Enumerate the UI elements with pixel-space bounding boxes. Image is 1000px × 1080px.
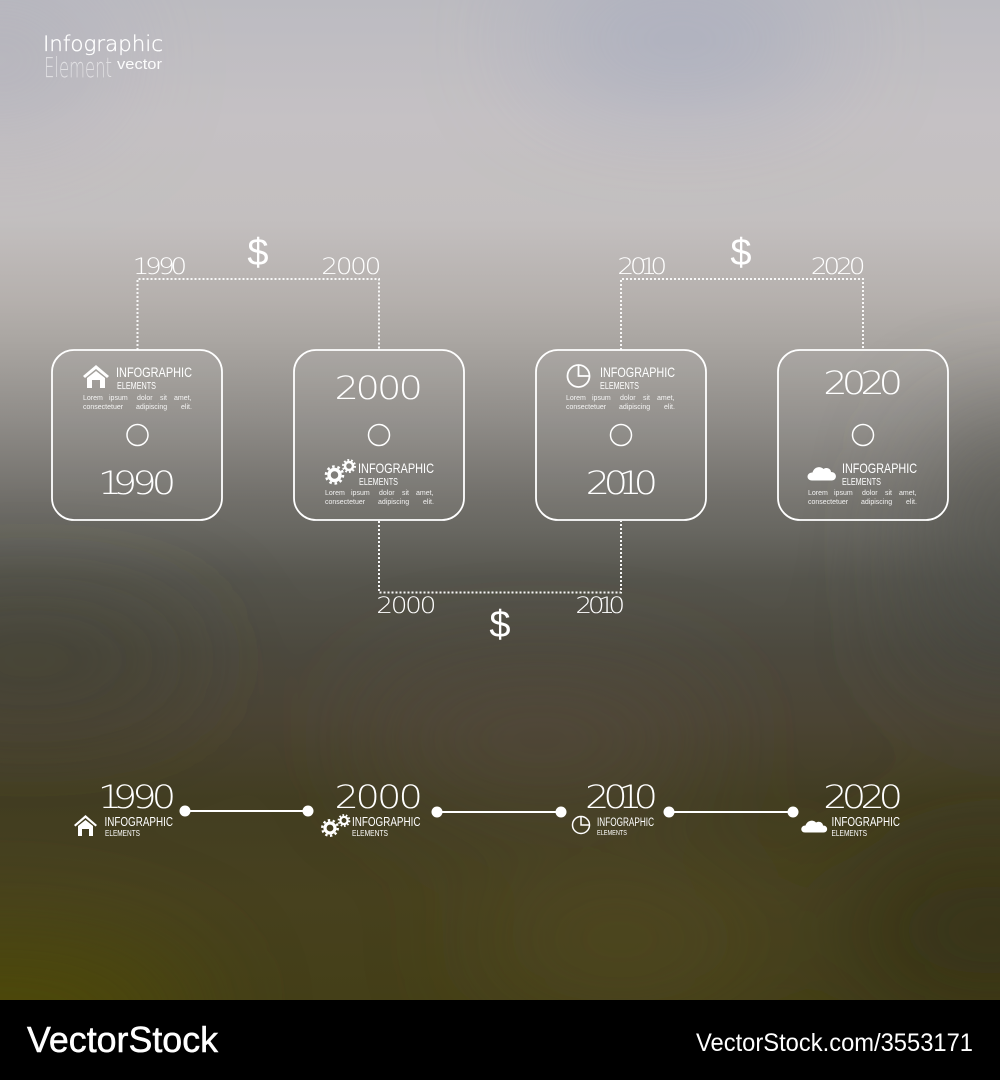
year: 2020 [823,365,903,402]
body text: elit. [664,404,675,411]
heading: ELEMENTS [117,381,156,392]
body text [83,395,192,411]
body text: ipsum [109,395,128,402]
heading: ELEMENTS [600,381,639,392]
label: INFOGRAPHIC [832,814,900,829]
body text: dolor [137,395,153,402]
label: INFOGRAPHIC [597,817,654,829]
connector labels: 2010 to 2020 [617,232,866,279]
icon: house [83,365,109,388]
label [352,814,420,838]
icon: house [74,815,97,836]
connector labels: 2010 to 2020: 2020 [811,253,866,279]
timeline segment: 1990 to 2000 [180,806,314,816]
body text [566,395,675,411]
body text: elit. [423,499,434,506]
watermark bar [0,1000,1000,1080]
watermark url: VectorStock.com/3553171 [696,1029,973,1057]
icon: gears [326,460,355,484]
title: vector [117,56,162,73]
body text [325,490,434,506]
body text: ipsum [351,490,370,497]
label: INFOGRAPHIC [104,814,173,829]
label [597,817,654,837]
body text: dolor [620,395,636,402]
body text: sit [402,490,409,497]
connector labels: 2000 to 2010: $ [489,604,511,646]
timeline item: 1990 [74,779,176,838]
connector: 2000 to 2010 [379,521,621,592]
panel: 2020 [778,350,948,520]
icon: pie chart [568,365,590,387]
body text: consectetuer [325,499,366,506]
node circle [127,424,148,446]
body text: ipsum [834,490,853,497]
body text: Lorem [83,395,103,402]
connector labels: 2000 to 2010: 2010 [575,592,625,618]
timeline segment: 2000 to 2010 [432,806,566,818]
heading [116,364,192,392]
body text: amet, [416,490,434,497]
year: 2000 [335,370,423,407]
label: ELEMENTS [832,828,867,838]
body text: sit [885,490,892,497]
watermark logo text: VectorStock [27,1019,219,1060]
connector: 2010 to 2020 [621,279,863,350]
body text: amet, [899,490,917,497]
body text: elit. [906,499,917,506]
timeline item: 2020 [801,779,903,838]
body text: Lorem [325,490,345,497]
connector labels: 2000 to 2010: 2000 [376,592,436,618]
timeline item: 2000: 2000 [335,779,423,816]
icon: cloud [801,821,827,832]
connector labels: 2010 to 2020: $ [730,232,752,274]
timeline item: 2020: 2020 [823,779,903,816]
heading [358,460,434,488]
timeline item: 2010 [572,779,658,837]
panel: 1990 [52,350,222,520]
timeline item: 1990: 1990 [98,779,176,816]
panel: 2000 [294,350,464,520]
heading: ELEMENTS [842,477,881,488]
heading: INFOGRAPHIC [842,460,917,476]
label: ELEMENTS [352,828,388,838]
node circle [852,424,874,446]
body text [808,490,917,506]
label: ELEMENTS [597,828,627,837]
body text: adipiscing [378,499,409,506]
body text: elit. [181,404,192,411]
title: Element [44,51,112,84]
connector labels: 1990 to 2000: $ [247,232,269,274]
connector labels: 1990 to 2000 [133,232,381,279]
heading: INFOGRAPHIC [116,364,192,380]
body text: Lorem [566,395,586,402]
connector labels: 2000 to 2010 [376,592,625,646]
timeline segment: 2010 to 2020 [664,806,798,818]
year: 2010 [586,465,658,502]
connector labels: 1990 to 2000: 2000 [321,253,381,279]
body text: dolor [379,490,395,497]
node circle [610,424,632,446]
heading: INFOGRAPHIC [358,460,434,476]
body text: consectetuer [566,404,607,411]
label [104,814,173,838]
body text: consectetuer [83,404,124,411]
heading [600,364,675,392]
body text: adipiscing [861,499,892,506]
timeline item: 2000 [322,779,423,838]
icon: gears [322,815,350,836]
heading: ELEMENTS [359,477,398,488]
connector: 1990 to 2000 [138,279,379,350]
body text: Lorem [808,490,828,497]
connector labels: 1990 to 2000: 1990 [133,253,187,279]
body text: adipiscing [619,404,650,411]
timeline item: 2010: 2010 [585,779,658,816]
icon: cloud [808,467,836,480]
body text: dolor [862,490,878,497]
label [832,814,900,838]
title [43,32,163,84]
connector labels: 2010 to 2020: 2010 [617,253,667,279]
heading [842,460,917,488]
year: 1990 [98,465,176,502]
body text: amet, [174,395,192,402]
body text: ipsum [592,395,611,402]
body text: sit [643,395,650,402]
body text: consectetuer [808,499,849,506]
label: ELEMENTS [105,828,140,838]
panel: 2010 [536,350,706,520]
icon: pie chart [572,816,590,834]
body text: adipiscing [136,404,167,411]
body text: amet, [657,395,675,402]
label: INFOGRAPHIC [352,814,420,829]
heading: INFOGRAPHIC [600,364,675,380]
body text: sit [160,395,167,402]
title: Infographic [43,32,163,56]
node circle [368,424,390,446]
